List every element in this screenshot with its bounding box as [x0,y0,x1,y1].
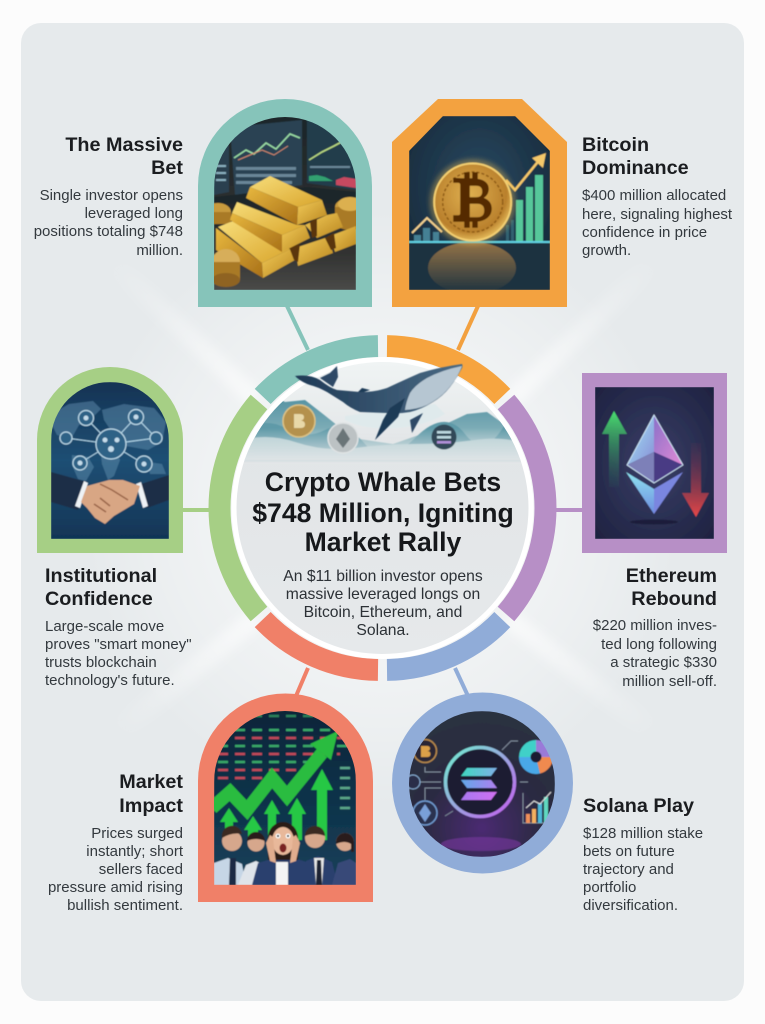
subtitle: Bitcoin, Ethereum, and [304,604,462,621]
text block: the massive bet: leveraged long [85,205,183,222]
text block: institutional confidence: Confidence [45,588,153,610]
text block: market impact: instantly; short [86,843,184,860]
text block: institutional confidence: technology's future. [45,672,175,689]
text block: market impact: pressure amid rising [48,879,183,896]
text block: solana play: $128 million stake [583,825,703,842]
text block: ethereum rebound [593,565,717,690]
text block: institutional confidence: Large-scale move [45,618,164,635]
text block: bitcoin dominance: growth. [582,242,631,259]
text block: the massive bet: million. [136,242,183,259]
waves and coins illustration [244,399,521,462]
text block: bitcoin dominance: Bitcoin [582,134,649,156]
subtitle: An $11 billion investor opens [283,568,483,585]
text block: bitcoin dominance: confidence in price [582,224,707,241]
text block: bitcoin dominance: here, signaling highest [582,206,733,223]
text block: the massive bet: Single investor opens [40,187,183,204]
connector lines [182,306,583,696]
text block: solana play: portfolio [583,879,636,896]
text block: market impact: bullish sentiment. [67,897,183,914]
title [252,467,514,557]
text block: solana play: diversification. [583,897,678,914]
panel: bitcoin dominance image [392,99,567,307]
text block: ethereum rebound: million sell-off. [622,673,717,690]
panel: market impact image [198,693,373,902]
panel: ethereum rebound image [582,373,727,553]
panel: solana play image [392,692,573,874]
subtitle [283,568,483,639]
panel: the massive bet image [198,99,372,307]
whale [295,364,462,440]
title: Crypto Whale Bets [265,467,501,497]
text block: market impact: sellers faced [99,861,183,878]
text block: solana play: Solana Play [583,795,694,817]
text block: market impact: Impact [119,795,183,817]
text block: the massive bet: Bet [151,157,183,179]
text block: ethereum rebound: Ethereum [626,565,717,587]
text block: bitcoin dominance: $400 million allocated [582,187,726,204]
panel: institutional confidence image [37,367,183,553]
text block: institutional confidence: trusts blockchain [45,654,157,671]
text block: ethereum rebound: a strategic $330 [610,654,717,671]
text block: ethereum rebound: Rebound [631,588,717,610]
text block: ethereum rebound: ted long following [601,636,717,653]
text block: market impact: Prices surged [91,825,183,842]
title: Market Rally [305,527,462,557]
text block: ethereum rebound: $220 million inves- [593,617,717,634]
ring segments around the centre [220,346,545,670]
subtitle: Solana. [356,622,410,639]
text block: the massive bet: positions totaling $748 [34,223,183,240]
text block: market impact: Market [119,771,183,793]
text block: the massive bet: The Massive [65,134,183,156]
text block: institutional confidence: proves "smart money" [45,636,192,653]
text block: the massive bet [34,134,183,259]
title: $748 Million, Igniting [252,498,514,528]
text block: solana play: bets on future [583,843,675,860]
subtitle: massive leveraged longs on [286,586,480,603]
text block: bitcoin dominance [582,134,733,259]
text block: solana play: trajectory and [583,861,674,878]
text block: institutional confidence: Institutional [45,565,157,587]
text block: bitcoin dominance: Dominance [582,157,689,179]
central circle [230,357,541,659]
text block: solana play [583,795,703,914]
text block: market impact [48,771,184,914]
text block: institutional confidence [45,565,192,689]
